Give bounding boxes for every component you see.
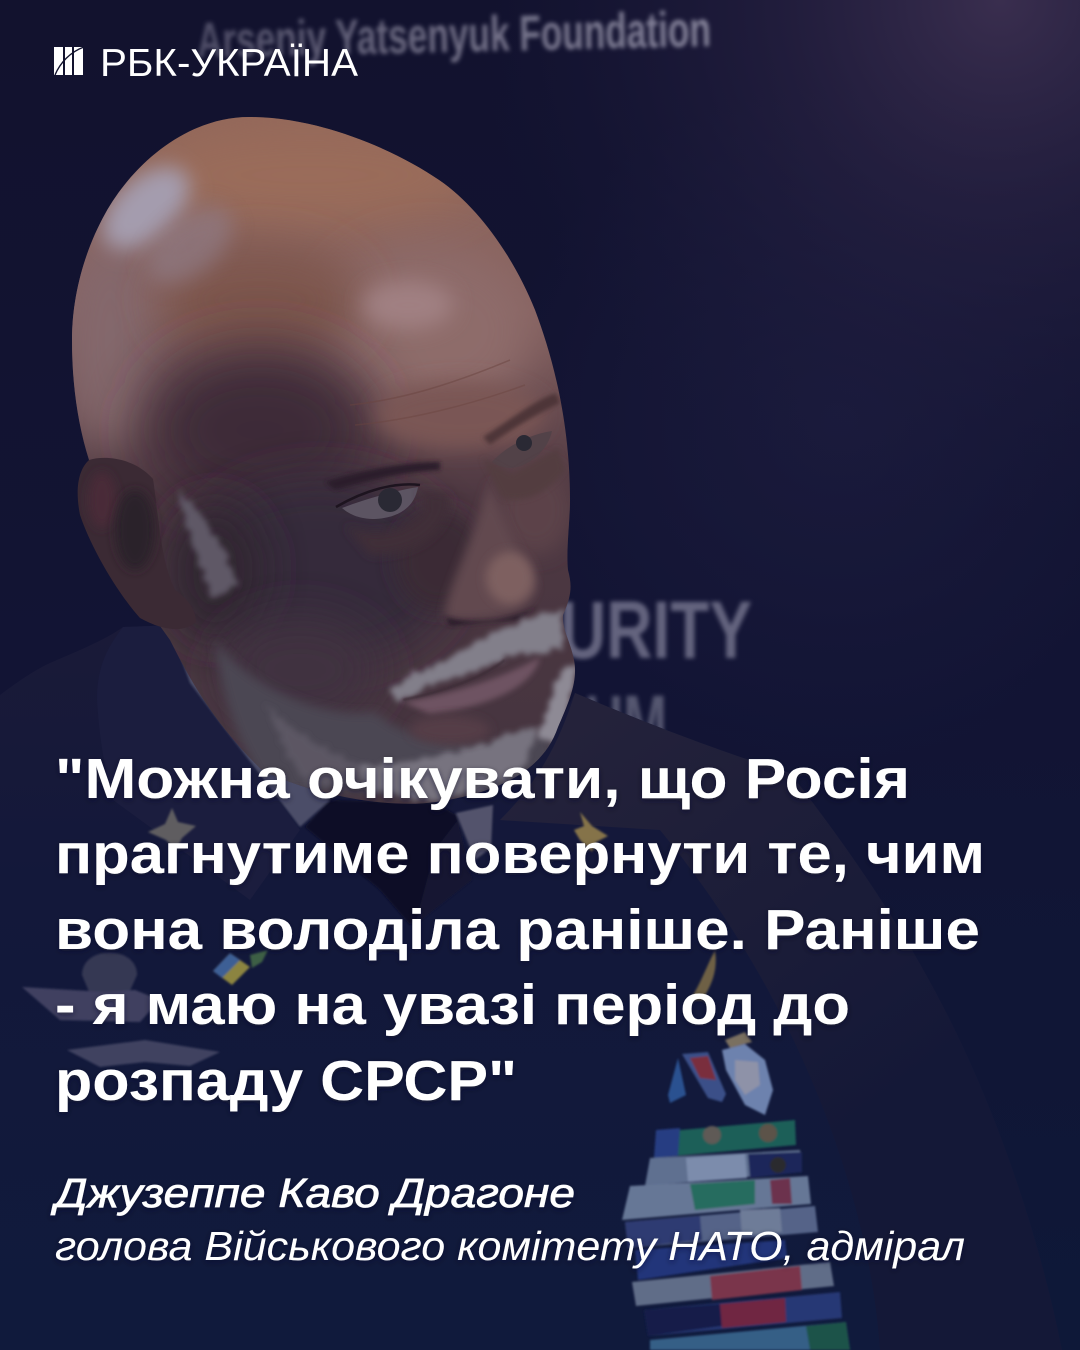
blurred backdrop text: security forum [560,585,752,770]
sideburn and beard [215,640,560,800]
quote: - я маю на увазі період до [55,973,850,1037]
nose [445,480,535,620]
insignia: badges [668,1032,773,1115]
wordmark: РБК-УКРАЇНА [100,42,358,85]
blurred backdrop text: security forum: UM [585,679,667,770]
icon: logo mark [54,47,84,75]
insignia: collar leaves [148,808,608,852]
insignia: gold leaf [690,950,716,1000]
medal ribbons [622,1120,850,1350]
mouth [403,657,540,714]
shirt and tie [178,650,493,925]
lapel [97,625,300,900]
brow and eye: viewer right [483,393,560,445]
quote: "Можна очікувати, що Росія [55,747,910,811]
attribution: speaker role: голова Військового комітету НАТО, адмірал [55,1223,965,1269]
moustache [388,611,564,702]
forehead wrinkles [350,360,510,405]
dark temple and cheek [145,345,375,515]
uniform: admiral's jacket [0,625,1062,1350]
highlights [94,156,201,260]
ear [78,458,196,629]
insignia: Ukrainian flag pin [213,950,268,985]
blurred backdrop text: security forum: URITY [560,585,752,676]
scalp tones [140,125,480,225]
insignia: parachute and wings [22,952,220,1067]
quote [55,747,985,1113]
attribution: speaker name: Джузеппе Каво Драгоне [51,1170,575,1216]
quote: прагнутиме повернути те, чим [55,822,985,886]
portrait: head and face [60,117,578,804]
brow and eye: viewer left [325,462,440,490]
logo: РБК-Україна [54,42,358,85]
quote: розпаду СРСР" [55,1049,517,1113]
quote: вона володіла раніше. Раніше [55,898,980,962]
